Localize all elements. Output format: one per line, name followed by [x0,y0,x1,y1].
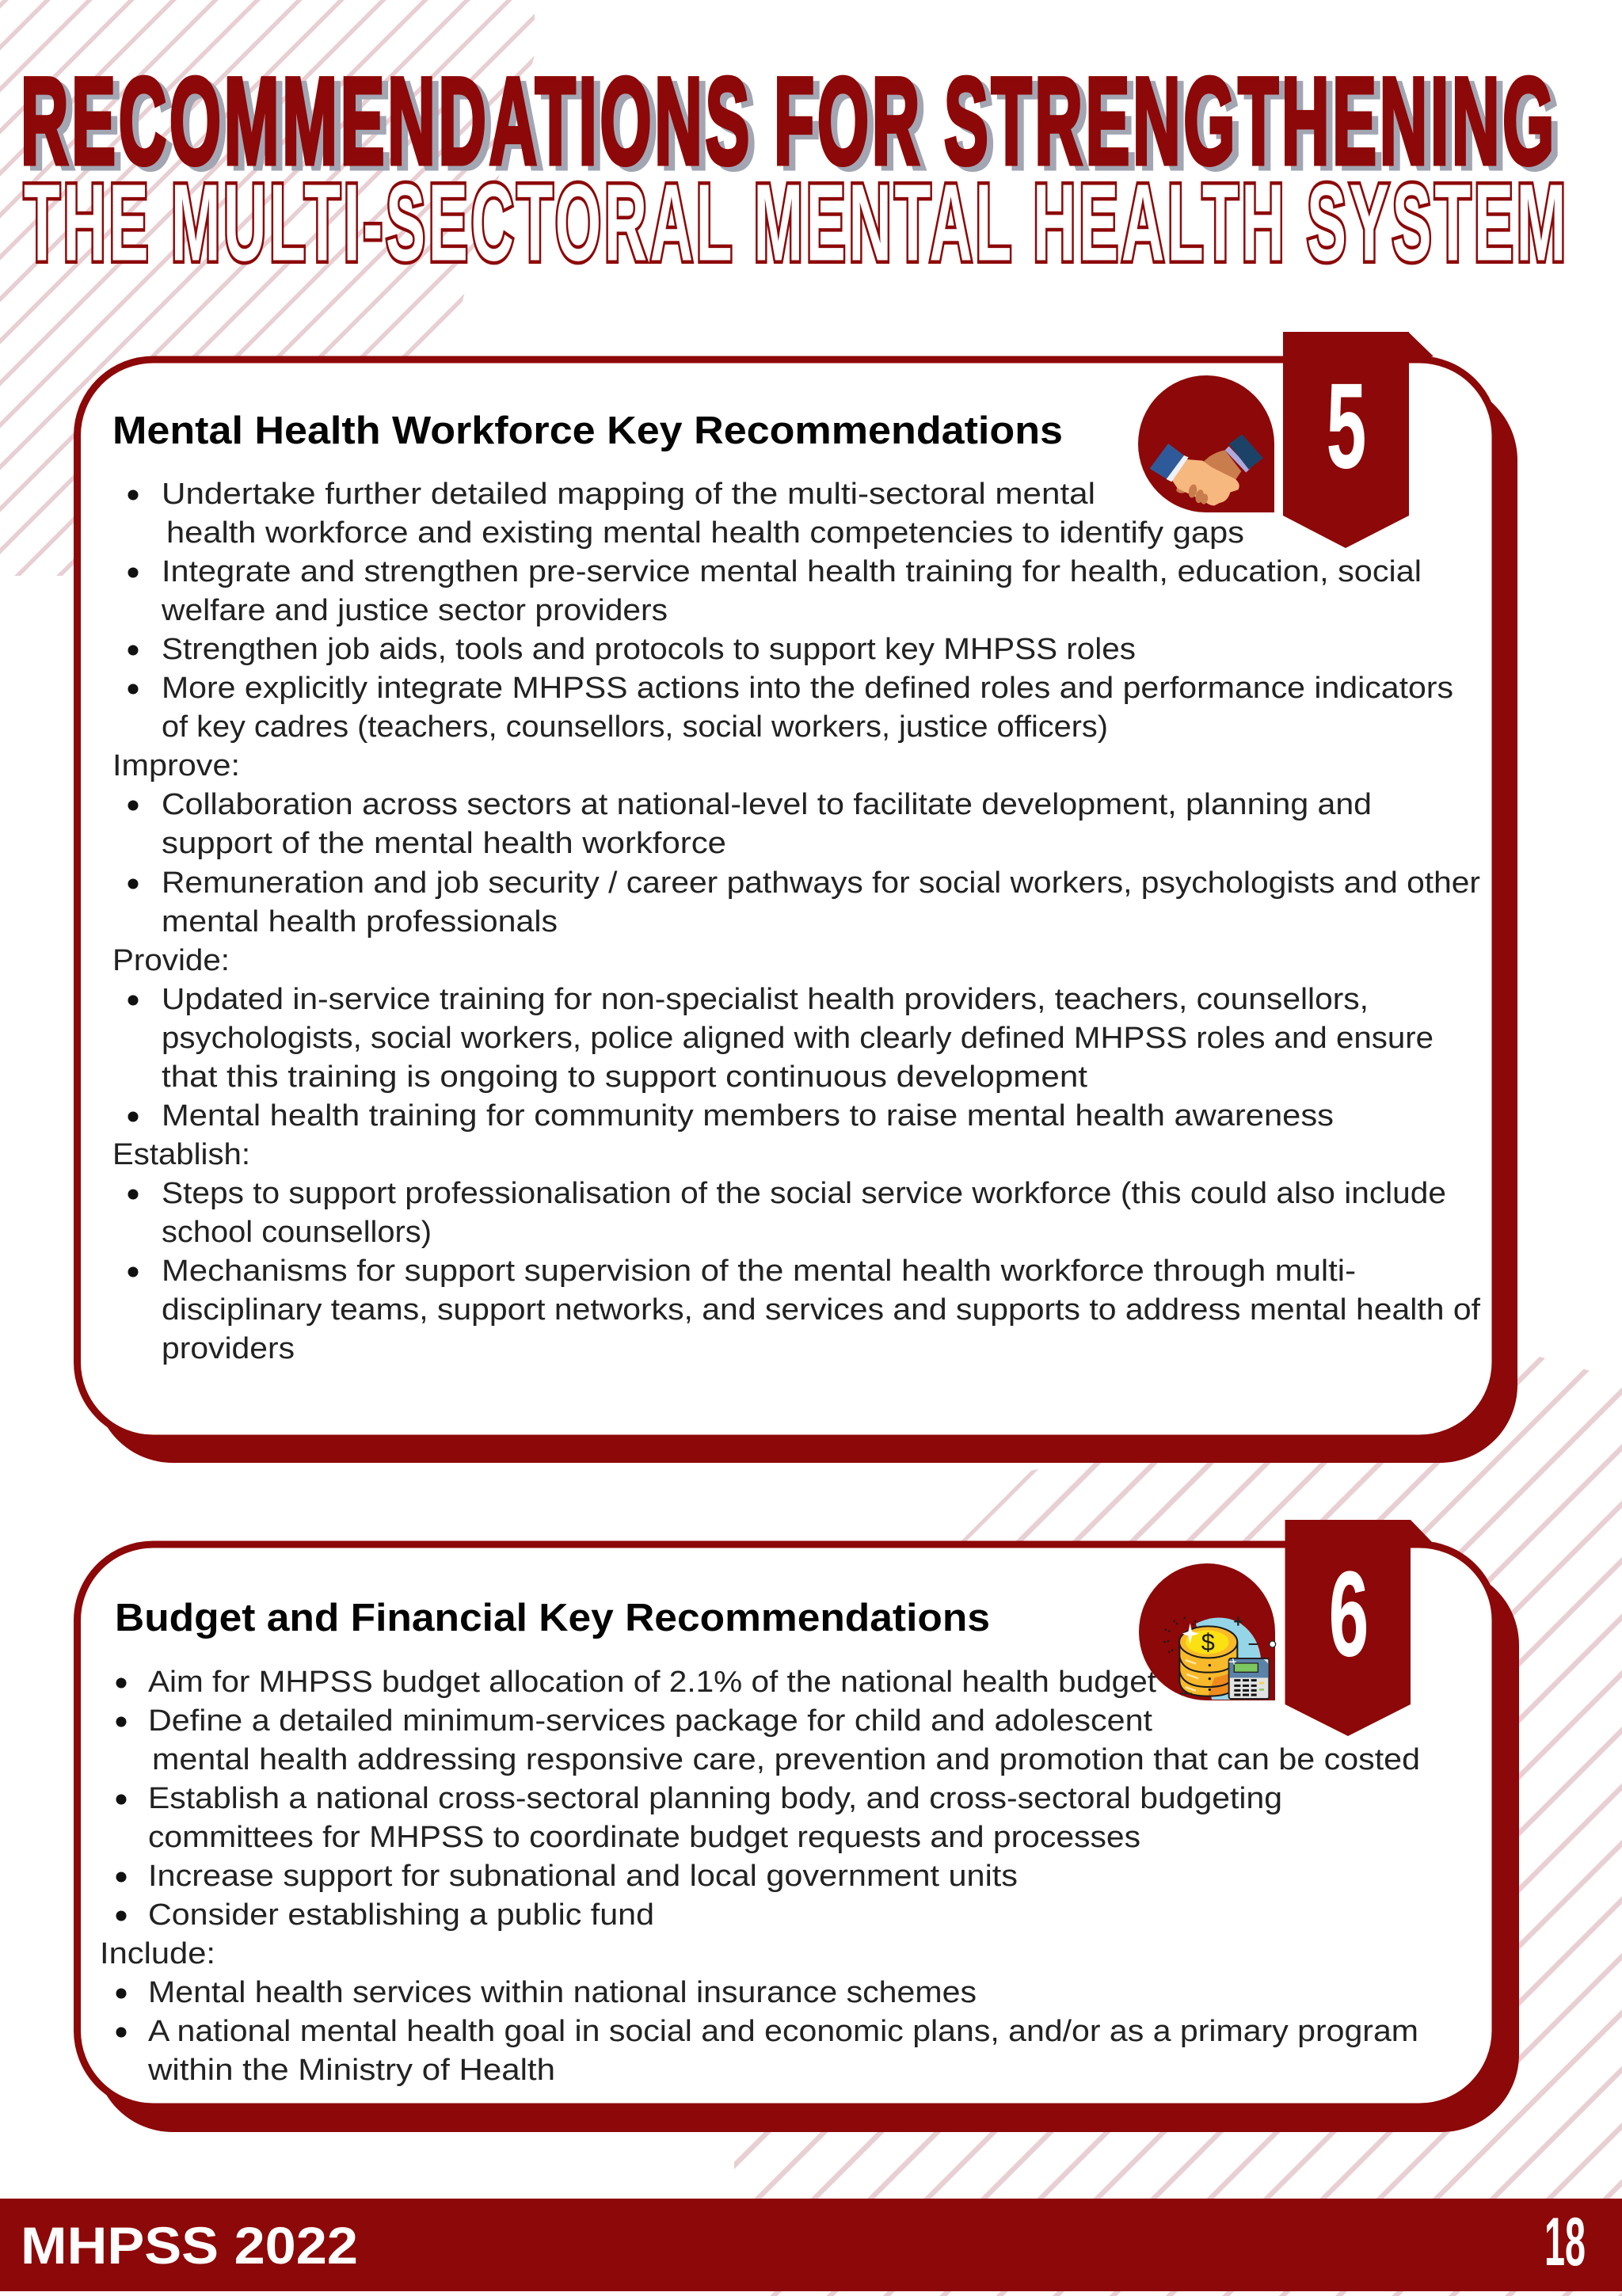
text: workforce recommendations: that this training is ongoing to support continuous development [162,1060,1087,1094]
ribbon number 6: 6 [1329,1547,1369,1681]
text: workforce recommendations: Establish: [112,1138,250,1171]
card shadow [95,1567,1519,2132]
text: workforce recommendations: disciplinary teams, support networks, and services and supports to address mental health of [162,1293,1480,1327]
text: workforce recommendations: Collaboration across sectors at national-level to facilitate development, planning and [162,788,1372,821]
card body [78,1544,1495,2107]
panel: budget and financial [78,1520,1519,2132]
text: workforce recommendations: Provide: [112,944,230,977]
text: budget recommendations: Consider establishing a public fund [148,1898,654,1932]
heading: Budget and Financial Key Recommendations [115,1597,990,1639]
footer bar [0,2199,1622,2291]
icon: coins and calculator [1139,1563,1276,1700]
card body [78,360,1495,1438]
text: workforce recommendations: More explicitly integrate MHPSS actions into the defined roles and performance indicators [162,672,1453,705]
text: workforce recommendations: Remuneration and job security / career pathways for social workers, psychologists and other [162,866,1480,900]
text: workforce recommendations [112,478,1480,1365]
text: workforce recommendations: providers [162,1332,295,1365]
text: workforce recommendations: Mental health training for community members to raise mental health awareness [162,1099,1334,1133]
text: workforce recommendations: welfare and justice sector providers [161,594,668,627]
ribbon number 5 [1283,332,1434,548]
text: workforce recommendations: Strengthen job aids, tools and protocols to support key MHPSS roles [162,633,1136,666]
text: budget recommendations [100,1666,1420,2087]
text: workforce recommendations: of key cadres (teachers, counsellors, social workers, justice officers) [162,710,1108,744]
page number: 18 [1544,2204,1586,2280]
text: workforce recommendations: mental health professionals [162,905,558,939]
heading: Mental Health Workforce Key Recommendations [112,409,1063,452]
text: budget recommendations: A national mental health goal in social and economic plans, and/or as a primary program [148,2015,1418,2048]
text: budget recommendations: Include: [100,1937,215,1970]
text: workforce recommendations: Undertake further detailed mapping of the multi-sectoral mental [162,478,1095,511]
text: workforce recommendations: school counsellors) [162,1216,432,1249]
icon: handshake [1138,375,1274,512]
text: workforce recommendations: Updated in-service training for non-specialist health providers, teachers, counsellors, [162,983,1369,1016]
text: budget recommendations: Increase support for subnational and local government units [148,1860,1018,1893]
icon: coins and calculator: $ [1201,1629,1215,1656]
ribbon number 6 [1285,1520,1433,1736]
text: workforce recommendations: Steps to support professionalisation of the social service workforce (this could also include [162,1177,1446,1210]
text: workforce recommendations: Improve: [112,749,240,782]
text: budget recommendations: Define a detailed minimum-services package for child and adolescent [148,1704,1152,1738]
text: budget recommendations: Mental health services within national insurance schemes [148,1976,977,2009]
text: budget recommendations: Aim for MHPSS budget allocation of 2.1% of the national health budget [148,1666,1156,1699]
text: budget recommendations: mental health addressing responsive care, prevention and promotion that can be costed [152,1743,1420,1776]
text: budget recommendations: Establish a national cross-sectoral planning body, and cross-sectoral budgeting [148,1782,1282,1815]
ribbon number 5: 5 [1327,359,1366,493]
text: budget recommendations: within the Ministry of Health [147,2054,555,2087]
panel: mental health workforce [78,332,1517,1463]
text: workforce recommendations: psychologists, social workers, police aligned with clearly defined MHPSS roles and ensure [162,1022,1434,1055]
text: budget recommendations: committees for MHPSS to coordinate budget requests and processes [148,1821,1140,1854]
text: workforce recommendations: Integrate and strengthen pre-service mental health training for health, education, social [162,555,1422,588]
text: workforce recommendations: Mechanisms for support supervision of the mental health workforce through multi- [162,1255,1356,1288]
text: workforce recommendations: support of the mental health workforce [162,827,726,860]
footer label: MHPSS 2022 [21,2216,358,2275]
card shadow [95,383,1517,1463]
title [21,52,1569,284]
text: workforce recommendations: health workforce and existing mental health competencies to identify gaps [166,516,1244,550]
